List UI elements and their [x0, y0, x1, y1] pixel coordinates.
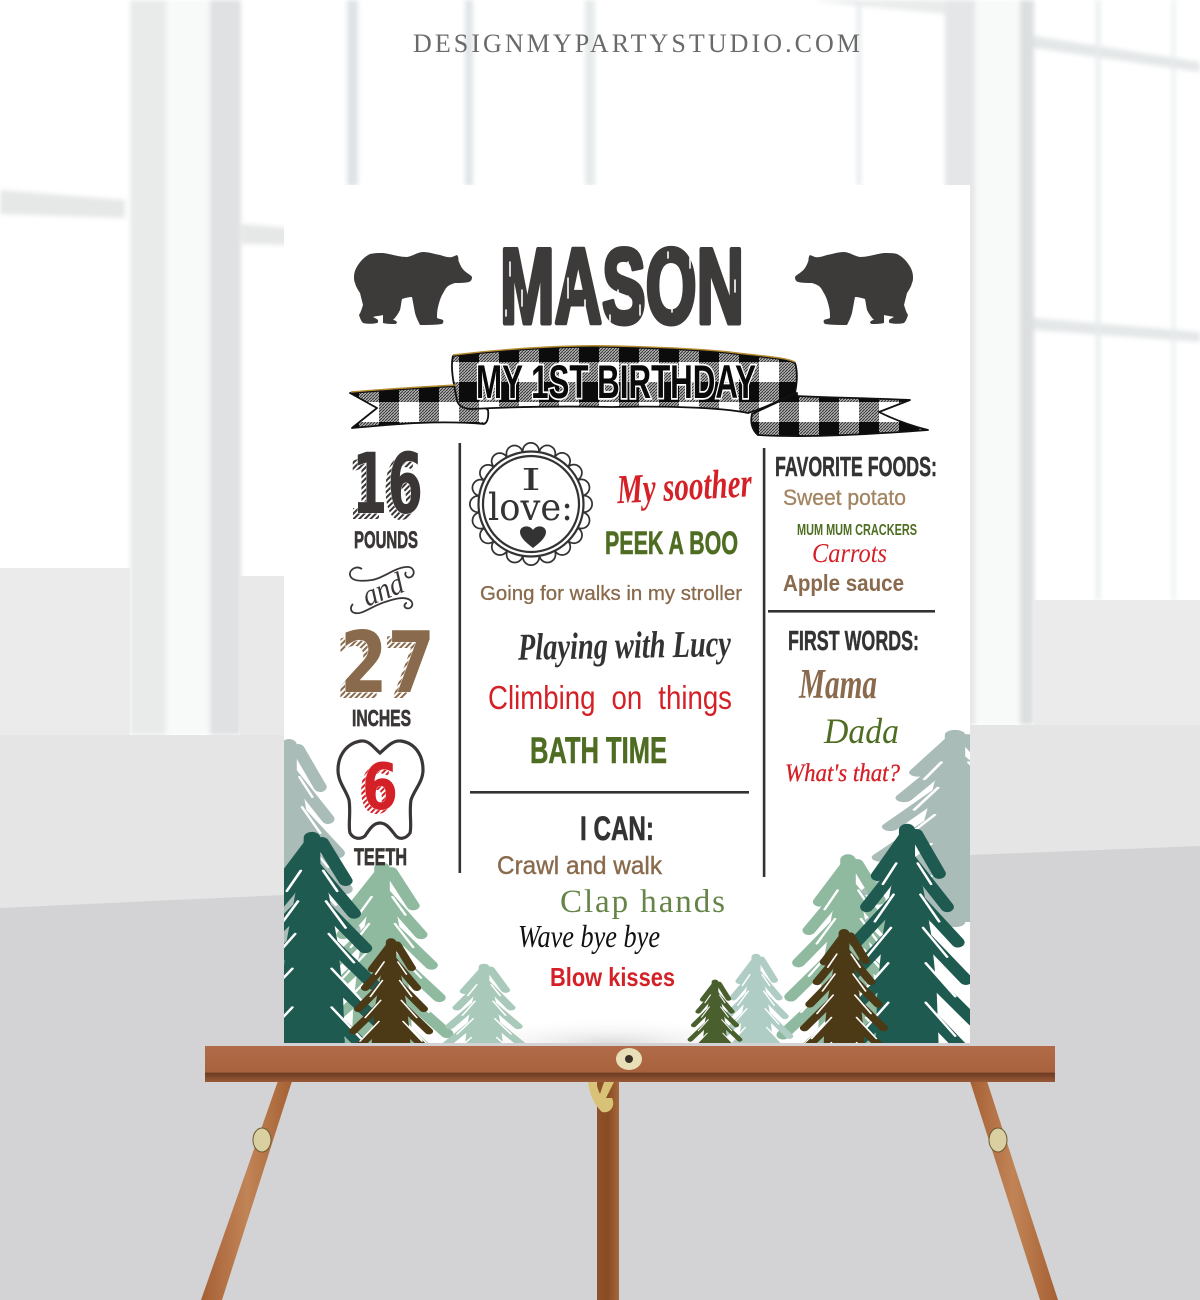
item: Going for walks: Going for walks in my stroller [480, 583, 742, 605]
heading: I can: I CAN: [580, 810, 654, 848]
brass fitting: right wing nut [989, 1128, 1007, 1152]
badge: I love: love: [488, 486, 573, 529]
panel: I love [478, 451, 754, 771]
item: What's that: What's that? [785, 760, 900, 787]
item: Playing with Lucy: Playing with Lucy [517, 623, 731, 669]
item: Apple sauce: Apple sauce [783, 570, 904, 596]
stat: 16 pounds: 16 [347, 441, 418, 539]
brass fitting: ledge [616, 1048, 642, 1070]
sign board [284, 185, 970, 1043]
item: Sweet potato: Sweet potato [783, 485, 906, 510]
item: Bath time: BATH TIME [530, 730, 667, 771]
tree: pale blue-green right [724, 954, 794, 1043]
tree: brown right [800, 929, 888, 1043]
tree: grey right [862, 730, 970, 937]
title: Mason: MASON [500, 226, 744, 346]
stat: 16 pounds: POUNDS [354, 527, 418, 554]
easel left leg [201, 1078, 293, 1300]
tree: dark teal left [284, 832, 380, 1043]
easel [201, 1046, 1058, 1300]
item: Crawl and walk: Crawl and walk [497, 852, 662, 880]
brass fitting: left wing nut [253, 1128, 271, 1152]
easel centre post [597, 1082, 619, 1300]
tree: small olive [688, 980, 742, 1043]
stat: 6 teeth: 6 [358, 755, 394, 829]
item: Mum mum crackers: MUM MUM CRACKERS [797, 522, 917, 539]
stat: 16 pounds: 16 [352, 435, 423, 533]
banner heading: MY 1ST BIRTHDAY [476, 355, 756, 408]
item: My soother: My soother [615, 459, 754, 512]
divider lines [458, 443, 935, 877]
stat: 6 teeth [338, 741, 423, 871]
panel: I can [497, 810, 725, 992]
tree: light green left [336, 863, 454, 1043]
item: Blow kisses: Blow kisses [550, 962, 675, 992]
item: Mama: Mama [798, 662, 877, 708]
heading: first words: FIRST WORDS: [788, 625, 919, 656]
stat: 16 pounds [347, 435, 423, 554]
badge: I love [478, 451, 584, 557]
forest [224, 735, 1040, 1099]
icon: right bear [795, 252, 913, 325]
item: Wave bye bye: Wave bye bye [518, 918, 660, 954]
tree: grey left [284, 739, 360, 969]
stat: 27 inches: 27 [335, 620, 430, 719]
stat: 6 teeth: 6 [362, 751, 398, 825]
ribbon right tail [751, 393, 928, 436]
banner: buffalo plaid ribbon [350, 347, 928, 436]
easel right leg [969, 1078, 1058, 1300]
stat: 6 teeth: TEETH [354, 844, 407, 871]
ribbon gold edge [351, 346, 795, 392]
flourish: and: and [357, 565, 409, 613]
panel: favorite foods [775, 451, 937, 596]
title: Mason [500, 226, 744, 346]
item: Dada: Dada [823, 711, 899, 751]
stat: 27 inches: 27 [340, 614, 435, 713]
icon: left bear [354, 252, 472, 325]
ribbon centre [452, 347, 797, 413]
brass fitting: hook [588, 1082, 614, 1112]
watermark heading: DESIGNMYPARTYSTUDIO.COM [413, 29, 860, 58]
easel ledge [205, 1046, 1055, 1082]
tree: dark teal right [850, 824, 970, 1043]
tree: pale green left [442, 964, 526, 1043]
floor shadow on board [470, 1000, 750, 1043]
tree: light green right [776, 854, 886, 1043]
item: Carrots: Carrots [812, 538, 887, 568]
heading: favorite foods: FAVORITE FOODS: [775, 451, 937, 482]
ribbon left tail [350, 386, 488, 428]
icon: tooth [338, 741, 423, 838]
tree: brown left [348, 938, 434, 1043]
panel: first words [785, 625, 919, 787]
item: Clap hands: Clap hands [560, 884, 725, 920]
item: Peek a boo: PEEK A BOO [605, 525, 738, 561]
panel: stats column [335, 435, 435, 871]
stat: 27 inches: INCHES [352, 705, 411, 731]
item: Climbing on things: Climbing on things [488, 679, 732, 716]
badge: I love: I [521, 463, 541, 498]
